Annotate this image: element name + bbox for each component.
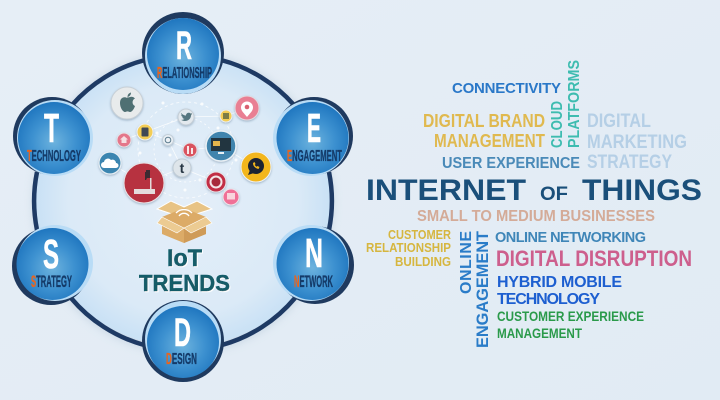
word: customer: CUSTOMER <box>388 228 451 242</box>
title: IoT: IoT <box>167 245 202 272</box>
node: N Network: NETWORK <box>294 272 333 291</box>
node: E Engagement <box>273 97 353 176</box>
word: customer experience: CUSTOMER EXPERIENCE <box>497 308 644 324</box>
node: D Design: DESIGN <box>166 351 197 368</box>
network lines and dots <box>110 102 256 198</box>
word: relationship: RELATIONSHIP <box>366 241 451 255</box>
node: R Relationship: RELATIONSHIP <box>157 65 212 82</box>
node: T Technology: TECHNOLOGY <box>27 148 81 165</box>
panel: word cloud <box>366 60 702 348</box>
icon: monitor <box>206 131 236 161</box>
word: management green: MANAGEMENT <box>497 325 582 341</box>
icon: pink chat <box>223 189 239 205</box>
icon: bars <box>183 143 197 157</box>
node: E Engagement: E <box>307 105 321 151</box>
word: digital disruption: DIGITAL DISRUPTION <box>496 246 692 271</box>
icon: clock <box>162 134 174 146</box>
word: building: BUILDING <box>395 255 451 269</box>
word: online vertical: ONLINE <box>458 231 475 294</box>
icon: tumblr: t <box>180 160 185 176</box>
word: small to medium businesses: SMALL TO MEDIUM BUSINESSES <box>417 208 655 225</box>
icon: whatsapp <box>241 152 271 182</box>
icon: mobile badge <box>137 124 153 140</box>
word: internet of things: INTERNET <box>366 174 526 207</box>
word: platforms: PLATFORMS <box>566 60 583 148</box>
word: cloud: CLOUD <box>549 101 566 148</box>
word: connectivity: CONNECTIVITY <box>452 80 561 97</box>
title: TRENDS: TRENDS <box>139 270 230 296</box>
node: T Technology <box>13 97 93 176</box>
node: R Relationship <box>142 12 224 94</box>
node: T Technology: T <box>44 105 59 151</box>
word: internet of things: OF <box>540 184 568 205</box>
icon: location pin <box>235 96 259 120</box>
word: technology: TECHNOLOGY <box>497 291 600 308</box>
wheel interior <box>36 53 330 347</box>
node: S Strategy: S <box>43 231 59 277</box>
word: digital: DIGITAL <box>587 111 651 132</box>
icon: target <box>206 172 226 192</box>
icon: home <box>117 133 131 147</box>
icon: router <box>124 163 164 203</box>
wheel ring <box>34 60 332 345</box>
word: internet of things <box>366 174 702 207</box>
icon: tumblr <box>173 159 191 177</box>
icon: cloud <box>99 152 121 174</box>
word: hybrid mobile: HYBRID MOBILE <box>497 274 622 291</box>
panel: IoT trends wheel <box>12 12 354 382</box>
node: S Strategy: STRATEGY <box>31 272 72 291</box>
word: strategy: STRATEGY <box>587 152 672 173</box>
icon: yellow chip <box>220 110 232 122</box>
icon: open box with wifi <box>157 201 212 243</box>
word: user experience: USER EXPERIENCE <box>442 155 580 172</box>
word: online networking: ONLINE NETWORKING <box>495 230 646 246</box>
wheel shadow <box>32 52 334 354</box>
word: marketing: MARKETING <box>587 132 687 153</box>
word: internet of things: THINGS <box>582 174 702 207</box>
node: D Design <box>142 300 224 382</box>
node: R Relationship: R <box>176 24 192 68</box>
node: E Engagement: ENGAGEMENT <box>287 148 342 165</box>
icon: apple <box>111 87 143 119</box>
word: digital brand: DIGITAL BRAND <box>423 111 545 131</box>
icon: twitter <box>178 109 194 125</box>
word: management: MANAGEMENT <box>434 131 545 151</box>
node: D Design: D <box>174 311 191 355</box>
node: N Network <box>273 225 354 304</box>
word: engagement vertical: ENGAGEMENT <box>473 230 492 348</box>
node: S Strategy <box>12 225 93 305</box>
node: N Network: N <box>305 230 323 276</box>
